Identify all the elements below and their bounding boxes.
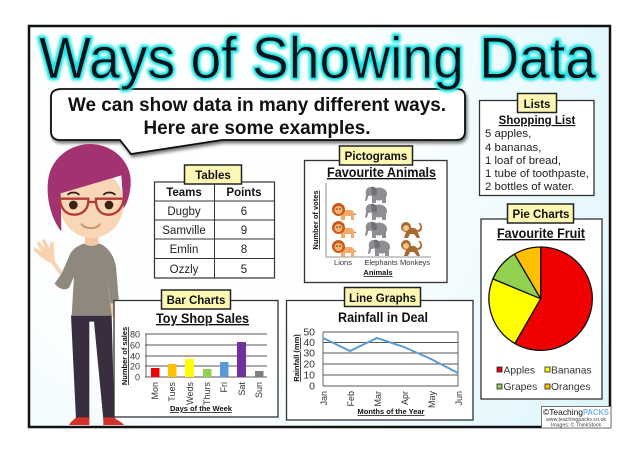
bar chart y axis [120, 327, 140, 385]
pictogram axis labels: Monkeys [400, 258, 430, 267]
glasses [60, 199, 124, 215]
bar chart y axis: Number of sales [120, 327, 129, 385]
pictogram heading: Favourite Animals [327, 165, 436, 180]
line graph x axis: Months of the Year [358, 407, 425, 416]
bar chart x axis: Tues [167, 382, 177, 402]
line graph x axis: Jan [319, 391, 329, 406]
waving hand [33, 239, 63, 276]
pictogram axis labels [311, 190, 430, 277]
bar chart x axis: Sun [254, 382, 264, 398]
bar chart x axis: Sat [237, 382, 247, 396]
pie charts label [508, 204, 574, 223]
elephants [365, 187, 390, 256]
pictogram axis labels: Lions [334, 258, 352, 267]
bar chart x axis: Mon [150, 382, 160, 400]
line graphs label: Line Graphs [349, 293, 416, 305]
panel: pie charts [481, 204, 602, 399]
panel: line graphs [286, 288, 473, 420]
line graph y axis: Rainfall (mm) [292, 334, 301, 382]
monkeys [401, 222, 422, 256]
pictogram axis labels: Animals [363, 268, 393, 277]
panel: pictograms [304, 146, 447, 282]
table grid: 9 [241, 225, 247, 237]
panel: tables [154, 165, 274, 278]
title: Ways of Showing Data [39, 26, 597, 91]
line graph y axis: 20 [303, 358, 315, 370]
bar chart y axis: 80 [130, 330, 140, 340]
pictograms label [340, 146, 412, 165]
pie chart [489, 247, 592, 350]
line graph x axis [319, 391, 464, 416]
pictogram axis labels: Elephants [364, 258, 398, 267]
bar chart y axis: 40 [130, 352, 140, 362]
table grid: 6 [241, 206, 247, 218]
line graph y axis: 30 [303, 348, 315, 360]
line graphs label [344, 288, 420, 306]
character: woman with glasses [33, 144, 131, 425]
table grid [154, 182, 274, 278]
tables label: Tables [195, 170, 231, 182]
line graph x axis: Feb [346, 391, 356, 407]
shopping list items [485, 128, 589, 193]
table grid: 5 [241, 264, 247, 276]
shopping list items: 1 loaf of bread, [485, 155, 561, 167]
pie legend: Oranges [551, 382, 590, 393]
right forearm [107, 297, 114, 317]
bar chart x axis: Weds [185, 382, 195, 405]
lions [332, 203, 356, 257]
logo: Teaching Packs: PACKS [583, 407, 609, 417]
panel: lists [480, 94, 594, 196]
pie charts label: Pie Charts [513, 209, 569, 221]
table grid: Ozzly [170, 264, 199, 276]
bar chart y axis: 0 [135, 372, 140, 382]
line graph heading: Rainfall in Deal [338, 310, 428, 325]
table grid: Dugby [167, 206, 201, 218]
bar chart x axis: Fri [219, 382, 229, 392]
pie heading: Favourite Fruit [497, 226, 585, 241]
neck [85, 233, 98, 247]
pictogram axis labels: Number of votes [311, 190, 320, 250]
bar chart plot [145, 334, 267, 377]
pictograms label: Pictograms [345, 151, 407, 163]
trousers [71, 315, 114, 419]
shopping list heading: Shopping List [499, 115, 575, 127]
shopping list items: 4 bananas, [485, 142, 541, 154]
lists label: Lists [524, 99, 550, 111]
line graph y axis: 50 [303, 326, 315, 338]
panel: bar charts [114, 290, 278, 417]
shopping list items: 2 bottles of water. [485, 181, 574, 193]
bubble text [68, 94, 446, 139]
line graph y axis: 40 [303, 337, 315, 349]
bar chart y axis: 60 [130, 340, 140, 350]
title: Ways of Showing Data [39, 26, 597, 91]
bar chart x axis: Days of the Week [170, 404, 233, 413]
table grid: Teams [166, 187, 202, 199]
bar chart heading: Toy Shop Sales [156, 311, 249, 326]
pie legend: Apples [504, 366, 535, 376]
table grid: Points [226, 187, 262, 199]
logo: Teaching Packs [542, 406, 611, 428]
line graph x axis: Jun [454, 391, 464, 406]
pie legend [497, 366, 592, 393]
line graph x axis: May [427, 391, 437, 408]
logo: Teaching Packs: www.teachingpacks.co.uk [546, 417, 607, 423]
line graph x axis: Mar [373, 391, 383, 406]
eyes and brows [68, 192, 115, 209]
bar chart y axis: 20 [130, 362, 140, 372]
jumper [55, 243, 119, 315]
hair [48, 144, 131, 231]
pie legend: Bananas [551, 366, 592, 376]
line graph y axis [292, 326, 315, 392]
bar chart x axis: Thurs [202, 382, 212, 405]
logo: Teaching Packs: Images: © ThinkStock [551, 422, 602, 428]
speech bubble [51, 89, 465, 154]
pie legend: Grapes [504, 382, 537, 393]
bubble text: We can show data in many different ways. [68, 94, 446, 116]
face [60, 169, 124, 238]
shopping list items: 1 tube of toothpaste, [485, 168, 589, 180]
smile [82, 224, 100, 228]
bar charts label [162, 290, 230, 309]
shopping list items: 5 apples, [485, 128, 531, 140]
logo: Teaching Packs: ©Teaching [543, 407, 583, 417]
pictogram axes [326, 183, 431, 257]
table grid: Samville [162, 225, 206, 237]
line graph y axis: 10 [303, 370, 315, 382]
table grid: Emlin [170, 244, 198, 256]
line graph y axis: 0 [309, 380, 315, 392]
bar chart x axis [150, 382, 264, 413]
line graph plot [323, 332, 458, 386]
shoes [69, 417, 124, 425]
bubble text: Here are some examples. [144, 117, 370, 139]
line graph x axis: Apr [400, 391, 410, 405]
table grid: 8 [241, 244, 247, 256]
bar charts label: Bar Charts [167, 295, 225, 307]
